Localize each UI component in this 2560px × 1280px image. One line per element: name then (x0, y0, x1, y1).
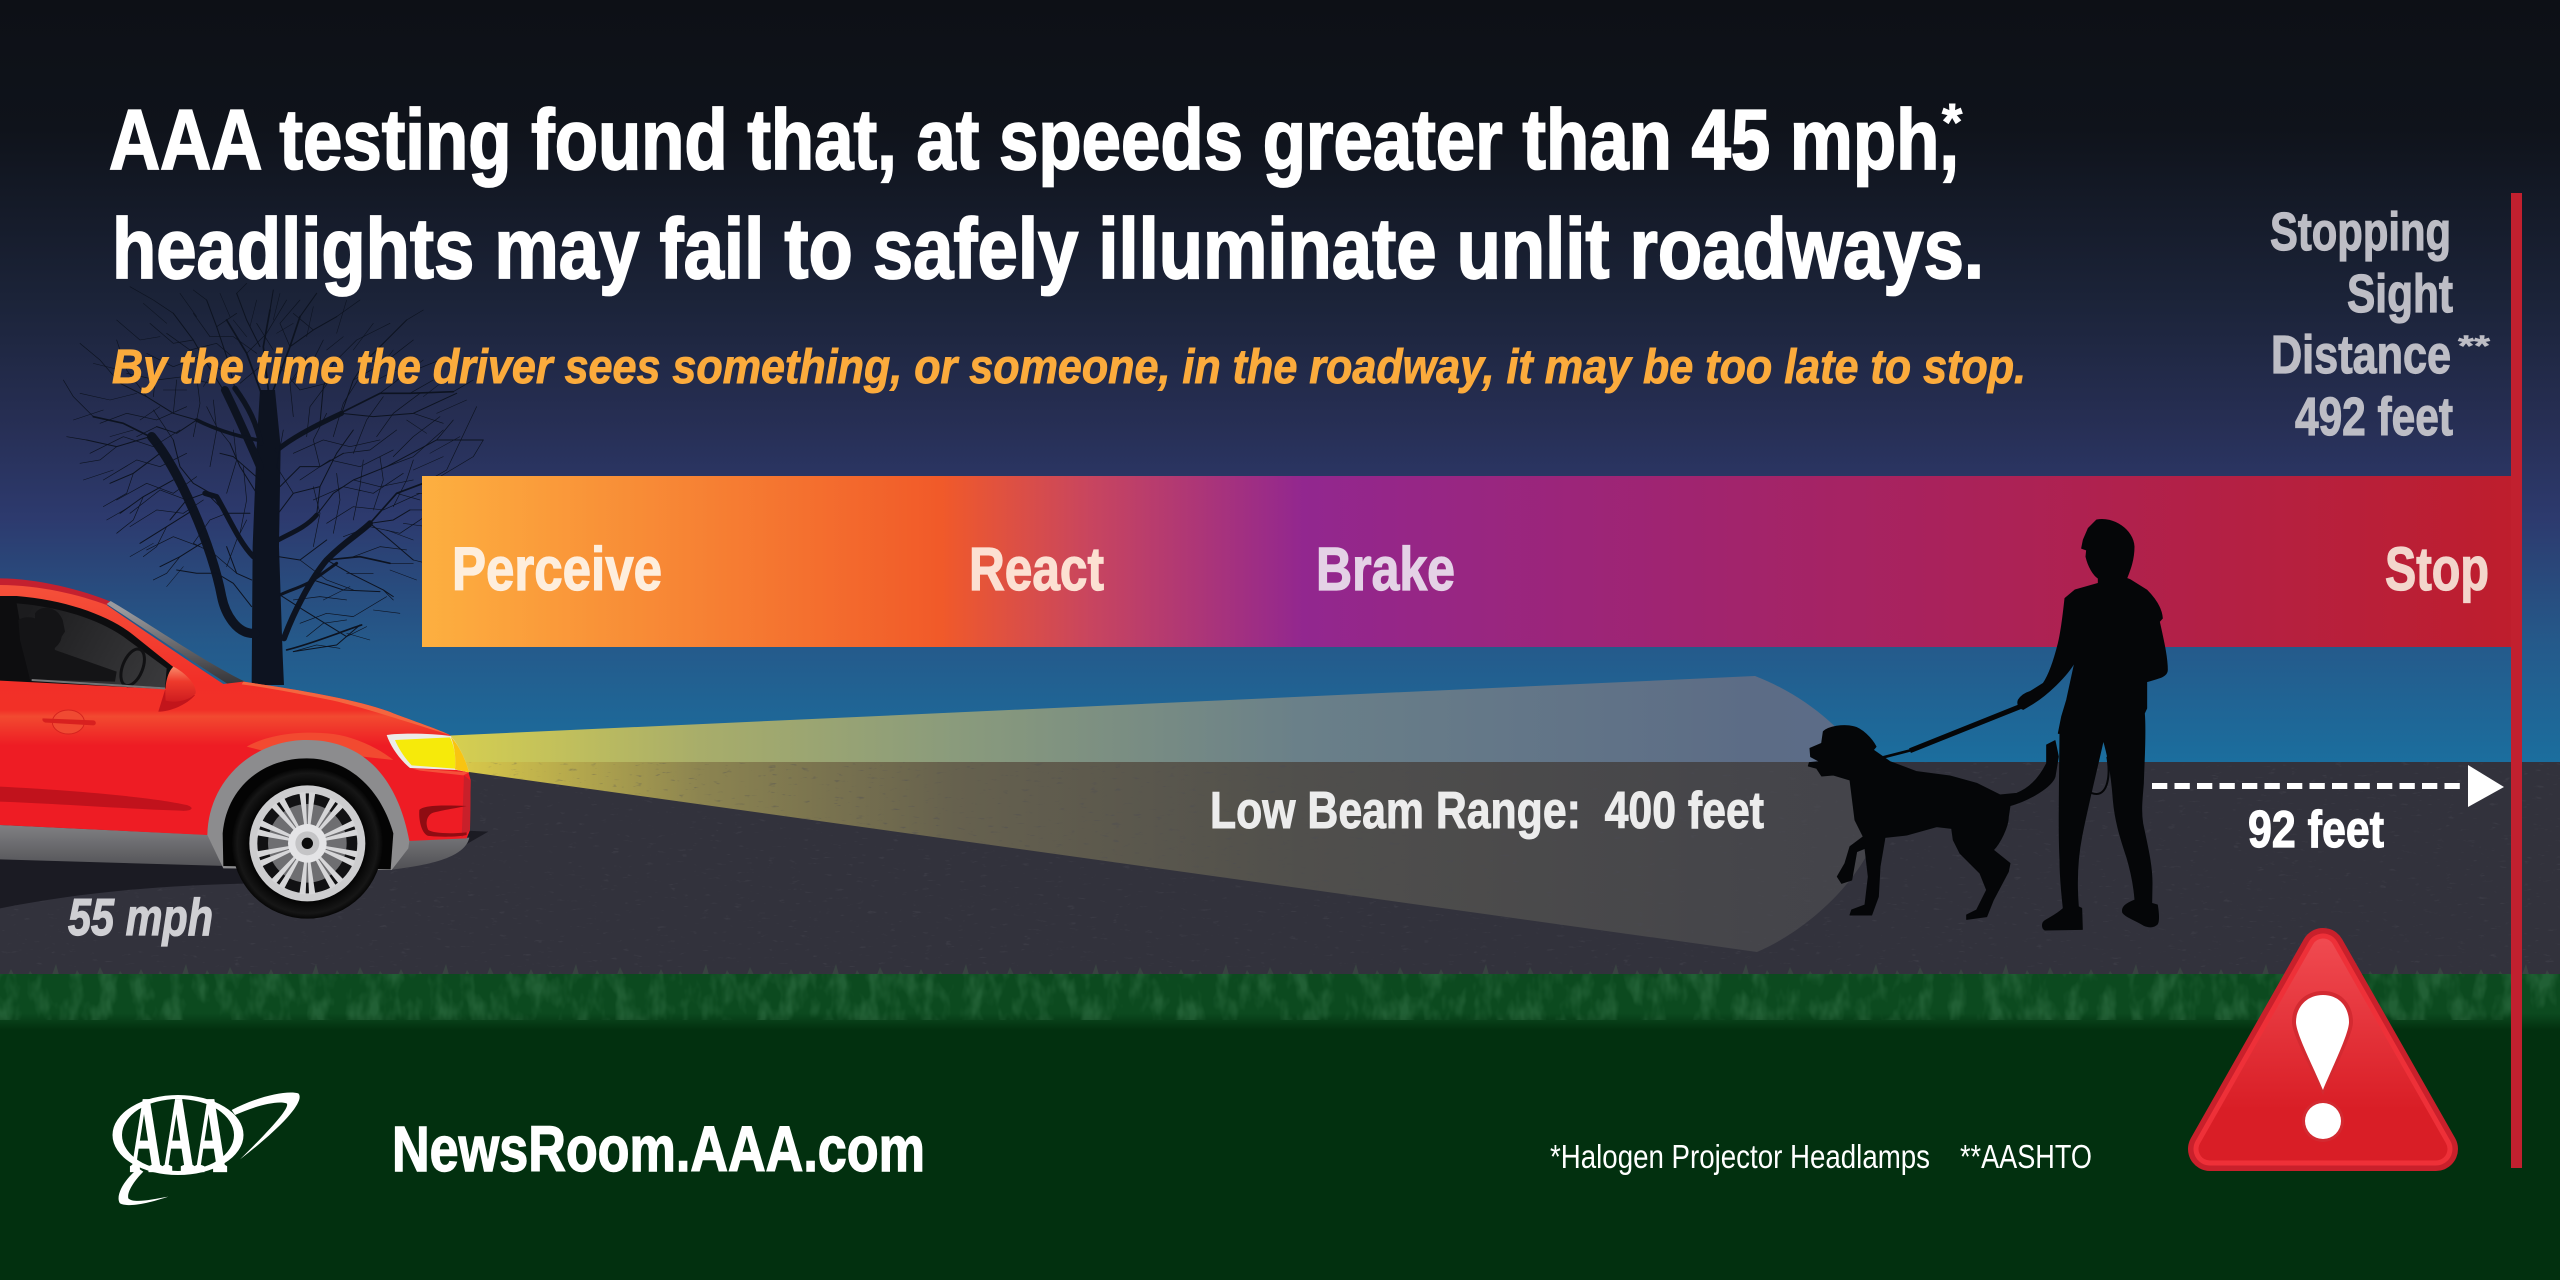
label: stopping sight distance: Stopping (2270, 202, 2451, 262)
leash loop (2088, 757, 2109, 794)
title: * (1942, 94, 1963, 152)
title: headlights may fail to safely illuminate unlit roadways. (112, 202, 1984, 297)
title (109, 93, 1984, 297)
wheel well (223, 758, 393, 869)
arch glow (247, 733, 393, 760)
front bumper (388, 838, 469, 870)
AAA logo: AAA (130, 1077, 227, 1195)
headlight low beam (440, 676, 1880, 952)
windshield (107, 601, 245, 685)
sill (0, 825, 227, 866)
car shadow (0, 831, 488, 908)
grass ground (0, 974, 2560, 1280)
owner silhouette (2018, 519, 2167, 930)
chart: perceive-react-brake-stop gradient bar (422, 476, 2512, 647)
hood highlight (242, 682, 450, 735)
label: 92 feet: 92 feet (2248, 801, 2384, 859)
label: stopping sight distance: 492 feet (2295, 387, 2453, 447)
bar stage labels: Brake (1316, 535, 1455, 603)
body crease (0, 787, 192, 811)
arrow: 92 feet overrun (2152, 765, 2504, 807)
dog and owner silhouettes (1808, 519, 2167, 930)
icon: warning triangle (2210, 950, 2436, 1149)
leash clip (1883, 750, 1912, 757)
footnotes: **AASHTO (1960, 1138, 2092, 1175)
wheel rim (249, 785, 365, 901)
bar stage labels: Stop (2385, 535, 2489, 603)
label: stopping sight distance: Sight (2347, 264, 2453, 324)
fog lamp recess (419, 805, 467, 837)
website url: NewsRoom.AAA.com (392, 1113, 925, 1185)
headlight outer amber (451, 737, 469, 772)
headlight lens (395, 737, 455, 769)
leash (1910, 706, 2022, 751)
side mirror shadow (158, 690, 195, 712)
side mirror (165, 667, 196, 702)
bar stage labels: React (969, 535, 1104, 603)
driver silhouette (18, 608, 117, 682)
wheel tire (232, 768, 383, 919)
car: red SUV front (0, 578, 488, 919)
grass mottling (0, 974, 2560, 1020)
road surface (0, 762, 2560, 974)
dog silhouette (1808, 726, 2058, 919)
door handle recess (52, 710, 84, 734)
grass verge top edge (0, 962, 2560, 975)
body (0, 585, 471, 841)
lower front highlight (410, 768, 469, 775)
stopping distance marker line (2511, 193, 2522, 1168)
window sill line (32, 680, 165, 688)
front edge (462, 775, 471, 837)
icon: bare tree silhouette (63, 283, 483, 685)
label: stopping sight distance: Distance (2271, 325, 2451, 385)
window glass (17, 603, 167, 687)
road texture (0, 762, 2560, 967)
label: low beam range: Low Beam Range: 400 feet (1210, 782, 1764, 840)
bar stage labels: Perceive (452, 535, 662, 603)
night sky background (0, 0, 2560, 780)
title: AAA testing found that, at speeds greater than 45 mph, (109, 93, 1959, 188)
bar stage labels (452, 535, 2489, 603)
wheel arch (207, 740, 409, 870)
grass band (0, 974, 2560, 1030)
steering wheel (116, 646, 149, 689)
headlight housing (387, 734, 469, 772)
label: stopping sight distance: ** (2458, 330, 2490, 363)
subtitle: By the time the driver sees something, or someone, in the roadway, it may be too late to stop. (112, 341, 2026, 394)
roof strip (0, 578, 111, 606)
door handle (42, 718, 96, 725)
footnotes: *Halogen Projector Headlamps (1550, 1138, 1930, 1175)
side window (0, 596, 175, 689)
label: car speed: 55 mph (68, 889, 213, 947)
label: stopping sight distance (2270, 202, 2490, 447)
